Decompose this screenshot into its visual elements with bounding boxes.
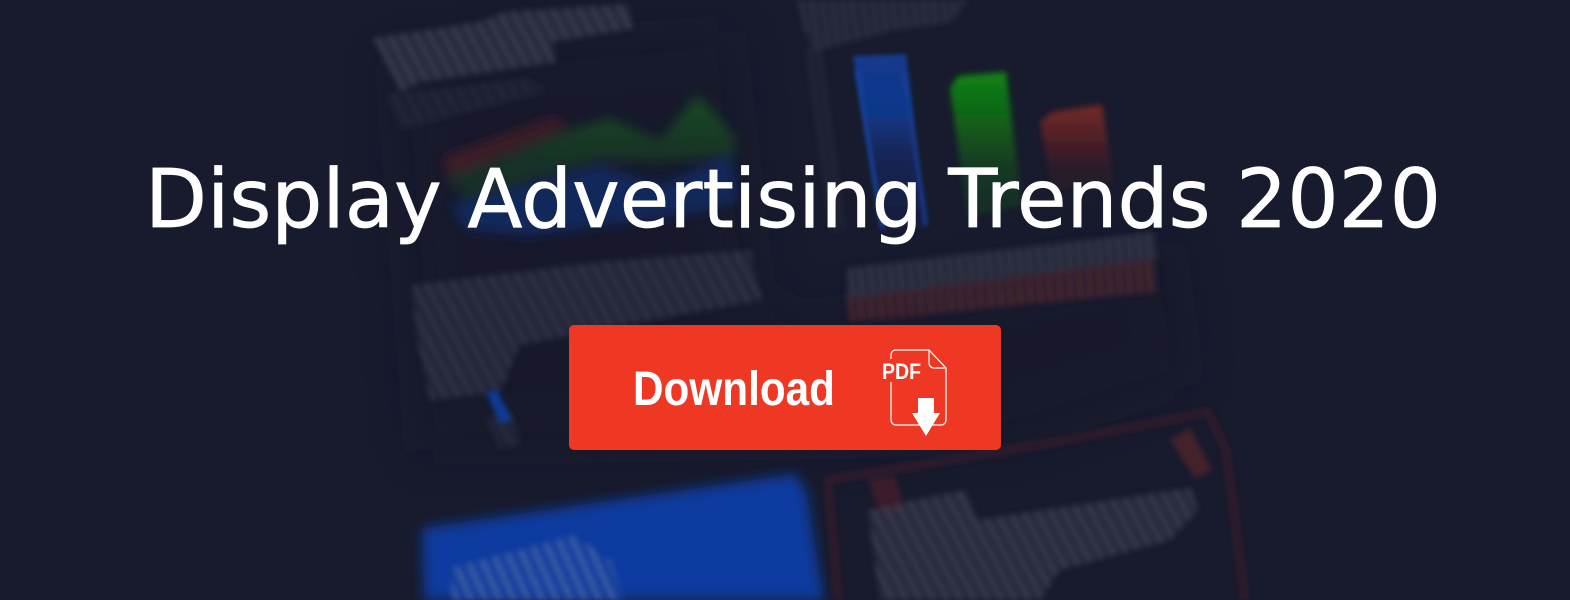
blurred text: top left <box>372 4 634 130</box>
title: Display Advertising Trends 2020 <box>145 153 1441 247</box>
blurred text: top centre <box>795 0 968 232</box>
blue small mark <box>486 390 512 424</box>
blurred text: bottom right <box>868 488 1198 600</box>
icon: PDF download: PDF <box>882 359 921 384</box>
blurred table rows <box>846 232 1158 322</box>
bar: green <box>950 72 1022 218</box>
chart: red area <box>442 116 564 176</box>
bar: red <box>1040 105 1114 190</box>
blurred text: left middle <box>412 250 762 448</box>
blue card <box>422 474 824 600</box>
red outlined card <box>828 412 1245 600</box>
chart: green area <box>445 95 735 200</box>
dark screenshot panels <box>390 30 1190 450</box>
area chart <box>442 95 740 236</box>
bar chart <box>853 54 1114 232</box>
chart: blue area <box>450 155 740 236</box>
icon: PDF download <box>880 350 946 436</box>
bar: blue <box>853 54 927 232</box>
download button <box>569 325 1001 450</box>
button label: Download <box>633 363 835 416</box>
